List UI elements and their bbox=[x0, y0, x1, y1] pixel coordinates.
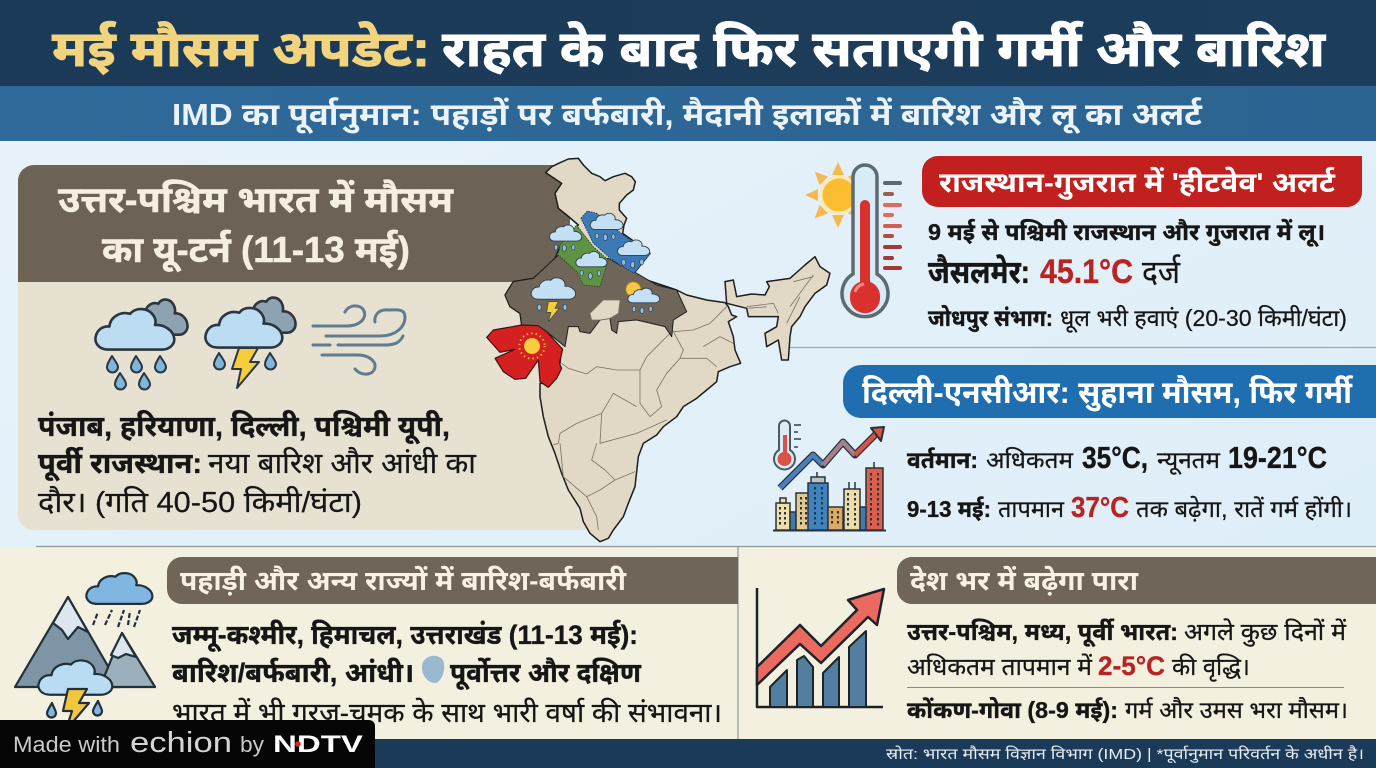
text: heatwave details: धूल भरी हवाएं (20-30 किमी/घंटा) bbox=[1060, 305, 1347, 333]
map: Gujarat bbox=[487, 325, 563, 387]
text: heatwave details: जैसलमेर: bbox=[928, 254, 1030, 290]
text: rising details: उत्तर-पश्चिम, मध्य, पूर्वी भारत: bbox=[907, 618, 1178, 647]
text: Delhi details: न्यूनतम bbox=[1157, 447, 1221, 475]
icon: sun and thermometer bbox=[805, 162, 900, 317]
footer: source note bbox=[0, 739, 1376, 768]
text: hills details: पूर्वोत्तर और दक्षिण bbox=[450, 657, 642, 690]
map clouds bbox=[531, 213, 660, 322]
title bbox=[0, 0, 1376, 86]
text: hills details bbox=[172, 619, 722, 728]
panel: heatwave alert bbox=[922, 156, 1362, 333]
badge: Made with echion by NDTV: echion bbox=[130, 727, 232, 759]
icon: Gujarat sun bbox=[519, 333, 545, 359]
panel: hills rain and snow bbox=[15, 557, 738, 730]
text: north-west details bbox=[38, 410, 476, 519]
icon: rain cloud bbox=[95, 300, 188, 390]
heading: north-west U-turn bbox=[58, 179, 454, 272]
icon: north-east blob bbox=[422, 656, 444, 683]
icon: wind bbox=[313, 306, 405, 374]
panel: rising temperature bbox=[757, 557, 1376, 723]
map: north-east bbox=[725, 257, 830, 360]
text: rising details bbox=[907, 618, 1348, 723]
text: north-west details: नया बारिश और आंधी का bbox=[208, 447, 476, 480]
heading: north-west U-turn: का यू-टर्न (11-13 मई) bbox=[102, 229, 410, 272]
footer: source note: स्रोत: भारत मौसम विज्ञान विभाग (IMD) | *पूर्वानुमान परिवर्तन के अधीन है। bbox=[886, 745, 1364, 764]
heading pill: Delhi bbox=[843, 365, 1376, 418]
icon: small thermometer bbox=[774, 420, 801, 469]
text: rising details: गर्म और उमस भरा मौसम। bbox=[1125, 697, 1348, 723]
text: heatwave details: 9 मई से पश्चिमी राजस्थान और गुजरात में लू। bbox=[928, 218, 1325, 247]
map: inner beige patch bbox=[590, 300, 620, 320]
heading pill: rising mercury: देश भर में बढ़ेगा पारा bbox=[910, 565, 1139, 596]
icon: thunder cloud bbox=[205, 298, 296, 388]
subtitle: IMD का पूर्वानुमान: पहाड़ों पर बर्फबारी, मैदानी इलाकों में बारिश और लू का अलर्ट bbox=[172, 97, 1203, 134]
subtitle bbox=[0, 86, 1376, 141]
text: Delhi details: तक बढ़ेगा, रातें गर्म होंगी। bbox=[1136, 496, 1352, 522]
title: राहत के बाद फिर सताएगी गर्मी और बारिश bbox=[442, 21, 1326, 77]
heading pill: Delhi: दिल्ली-एनसीआर: सुहाना मौसम, फिर गर्मी bbox=[862, 375, 1354, 412]
text: hills details: भारत में भी गरज-चमक के साथ भारी वर्षा की संभावना। bbox=[172, 697, 722, 728]
panel: Delhi NCR bbox=[773, 365, 1376, 530]
badge: Made with echion by NDTV: Made with bbox=[13, 732, 120, 757]
heading pill: heatwave: राजस्थान-गुजरात में 'हीटवेव' अलर्ट bbox=[939, 165, 1336, 200]
badge: Made with echion by NDTV: NDTV bbox=[273, 731, 363, 758]
text: rising details: अधिकतम तापमान में bbox=[907, 653, 1093, 681]
heading: north-west U-turn: उत्तर-पश्चिम भारत में मौसम bbox=[58, 179, 454, 220]
panel: north-west India bbox=[18, 165, 590, 530]
text: Delhi details: 9-13 मई: bbox=[907, 496, 991, 522]
text: rising details: अगले कुछ दिनों में bbox=[1184, 618, 1347, 647]
map: Punjab-Haryana bbox=[558, 225, 608, 287]
icon: city skyline bbox=[773, 462, 886, 530]
text: hills details: बारिश/बर्फबारी, आंधी। bbox=[172, 657, 414, 688]
text: Delhi details: 37°C bbox=[1071, 492, 1129, 524]
icon: rising bar chart bbox=[757, 588, 884, 707]
map: J&K-Himachal-Uttarakhand bbox=[581, 211, 650, 273]
text: rising details: कोंकण-गोवा (8-9 मई): bbox=[907, 697, 1118, 723]
map: mainland bbox=[505, 158, 741, 542]
badge: Made with echion by NDTV bbox=[0, 720, 375, 768]
badge: Made with echion by NDTV: by bbox=[240, 732, 264, 757]
heading pill: heatwave bbox=[922, 156, 1362, 207]
text: north-west details: दौर। (गति 40-50 किमी/घंटा) bbox=[38, 486, 362, 519]
text: Delhi details: अधिकतम bbox=[986, 447, 1074, 473]
text: north-west details: पूर्वी राजस्थान: bbox=[38, 447, 202, 481]
text: Delhi details bbox=[907, 440, 1352, 524]
text: north-west details: पंजाब, हरियाणा, दिल्ली, पश्चिमी यूपी, bbox=[38, 410, 450, 444]
text: heatwave details bbox=[928, 218, 1347, 333]
text: heatwave details: दर्ज bbox=[1142, 254, 1181, 290]
sun bbox=[805, 162, 866, 228]
panel: bottom section bbox=[0, 546, 1376, 740]
text: heatwave details: 45.1°C bbox=[1040, 253, 1133, 291]
heading pill: hills: पहाड़ी और अन्य राज्यों में बारिश-बर्फबारी bbox=[180, 565, 627, 596]
text: heatwave details: जोधपुर संभाग: bbox=[928, 305, 1053, 332]
text: rising details: की वृद्धि। bbox=[1172, 653, 1250, 682]
text: rising details: 2-5°C bbox=[1098, 651, 1165, 681]
icon: mountains with clouds bbox=[15, 573, 155, 730]
heading pill: rising mercury bbox=[897, 557, 1376, 604]
text: Delhi details: 19-21°C bbox=[1228, 440, 1327, 475]
text: Delhi details: तापमान bbox=[998, 496, 1065, 522]
map: India bbox=[487, 158, 830, 542]
text: hills details: जम्मू-कश्मीर, हिमाचल, उत्तराखंड (11-13 मई): bbox=[172, 619, 638, 652]
map: state borders bbox=[553, 275, 813, 530]
text: Delhi details: वर्तमान: bbox=[907, 447, 978, 473]
icon: rising arrow bbox=[780, 427, 884, 488]
heading pill: hills bbox=[167, 557, 738, 604]
map: heat-hit Rajasthan and west UP bbox=[505, 255, 687, 347]
title: मई मौसम अपडेट: bbox=[52, 21, 430, 77]
text: Delhi details: 35°C, bbox=[1082, 440, 1148, 475]
